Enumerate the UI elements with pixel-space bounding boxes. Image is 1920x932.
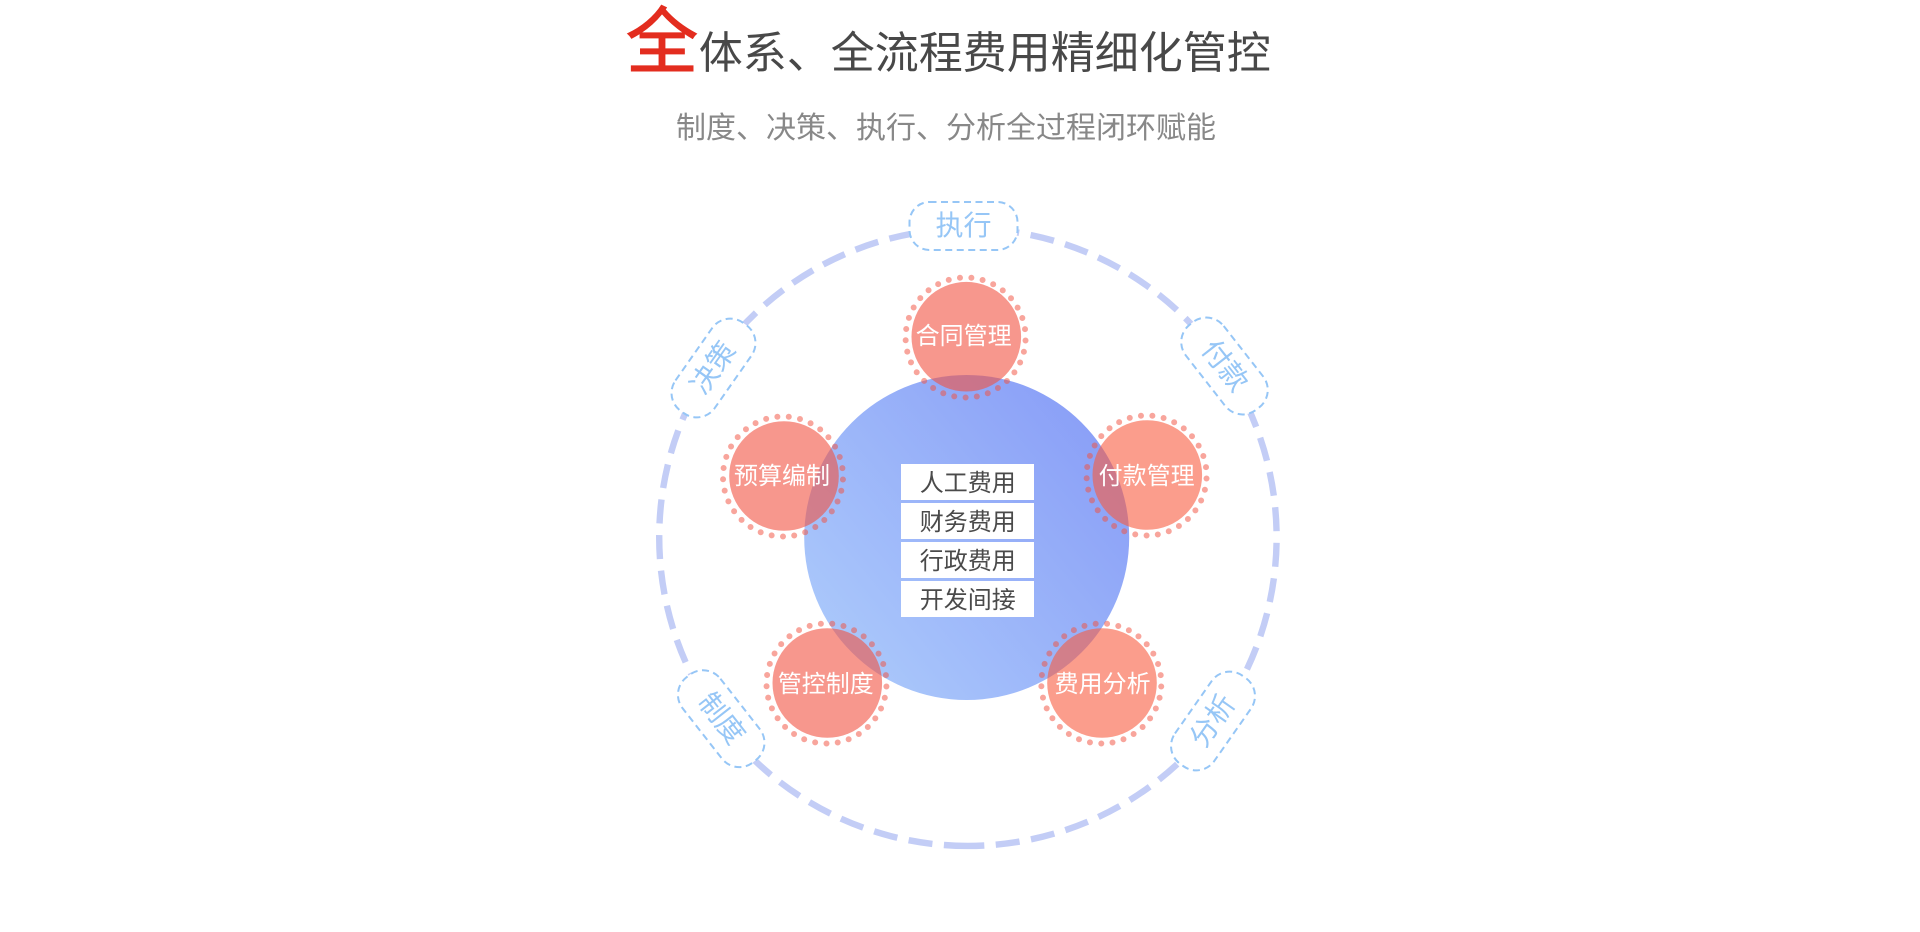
node: 管控制度 [766,624,886,744]
pill: 执行: 执行 [935,210,992,241]
pill: 付款 [1172,309,1277,423]
node: 付款管理: 付款管理 [1099,463,1195,490]
title: 全 [626,3,698,83]
node: 合同管理: 合同管理 [916,323,1012,350]
title: 体系、全流程费用精细化管控 [699,29,1271,78]
cost item: 行政费用: 行政费用 [920,548,1016,575]
node: 预算编制: 预算编制 [734,463,830,490]
pill: 执行 [910,202,1018,250]
cost item: 行政费用 [901,542,1034,578]
cost list [901,464,1034,617]
pill: 制度: 制度 [692,687,751,750]
node: 费用分析: 费用分析 [1055,671,1151,698]
pill: 付款: 付款 [1195,334,1254,397]
node: 付款管理 [1087,416,1207,536]
node: 预算编制 [723,416,843,536]
node: 合同管理 [906,278,1026,398]
cost item: 人工费用: 人工费用 [920,470,1016,497]
pill: 分析: 分析 [1184,689,1241,753]
central blue circle [804,375,1129,700]
subtitle: 制度、决策、执行、分析全过程闭环赋能 [676,112,1216,145]
cost item: 人工费用 [901,464,1034,500]
pill: 决策 [663,310,764,426]
pill: 制度 [669,661,773,776]
cost item: 财务费用 [901,503,1034,539]
node: 费用分析 [1041,624,1161,744]
cost item: 开发间接 [901,581,1034,617]
pill: 分析 [1162,663,1264,779]
cost item: 财务费用: 财务费用 [920,509,1016,536]
node: 管控制度: 管控制度 [778,671,874,698]
title [626,3,1271,83]
pill: 决策: 决策 [684,336,742,400]
cost item: 开发间接: 开发间接 [920,587,1016,614]
outer dashed ring [659,229,1277,846]
